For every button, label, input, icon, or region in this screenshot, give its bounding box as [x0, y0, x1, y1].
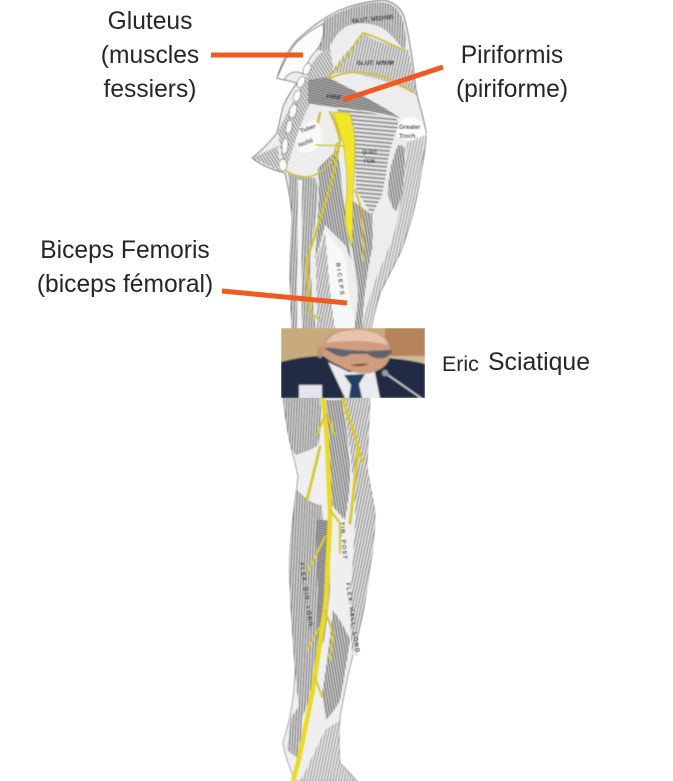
muscle text labels: GLUT. MEDIUS: [352, 15, 394, 25]
anatomical illustration: lower leg: [283, 398, 375, 781]
label: gluteus: fessiers): [104, 76, 196, 103]
label: biceps femoris: [37, 237, 213, 298]
label: biceps femoris: (biceps fémoral): [37, 271, 213, 298]
muscle text labels: Ischii: [298, 138, 314, 149]
biceps femoris tendon: [325, 230, 356, 330]
biceps right edge muscle: [352, 200, 373, 330]
piriformis muscle: [308, 77, 400, 118]
label: piriformis: Piriformis: [461, 42, 563, 69]
suit: [281, 356, 425, 398]
muscle text labels: PIRIF: [326, 94, 342, 102]
label: piriformis: (piriforme): [456, 76, 568, 103]
adductor region: [315, 150, 352, 262]
arrow: gluteus pointer: [211, 52, 303, 58]
dark calf centre muscle: [316, 520, 330, 660]
muscle text labels: FEM.: [364, 159, 377, 165]
label: gluteus: (muscles: [101, 42, 199, 69]
flexor hallucis muscle: [322, 610, 350, 720]
semitendinosus white band: [297, 180, 302, 330]
muscle text labels: [298, 15, 421, 297]
label: Eric Sciatique: Sciatique: [488, 349, 590, 376]
hamstring, inner thigh left: [288, 172, 318, 330]
microphone: [385, 373, 421, 398]
label: Eric Sciatique: [442, 349, 590, 376]
gluteus minimus muscle: [331, 34, 416, 95]
muscle text labels, lower leg: [298, 522, 360, 657]
arrow: biceps femoris pointer: [222, 291, 347, 303]
label: piriformis: [456, 42, 568, 103]
glasses: [323, 348, 392, 358]
muscle text labels: GLUT. MINIM: [357, 61, 394, 67]
quadratus femoris muscle: [354, 126, 396, 215]
ischial tuberosity bone: [296, 120, 322, 153]
middle popliteus muscle: [322, 400, 350, 520]
anatomical illustration: upper leg: [252, 0, 426, 330]
badge: [299, 385, 322, 398]
muscle text labels, lower leg: FLEX. DIG. LONG.: [298, 562, 313, 630]
small nerve branches, upper: [285, 33, 413, 320]
sacrotuberous ligament wedge: [252, 146, 280, 171]
muscle text labels: Greater: [399, 125, 421, 131]
ear: [317, 346, 323, 358]
coccyx bone chain: [279, 62, 313, 171]
photo background: [281, 328, 386, 363]
ankle: [287, 700, 303, 760]
greater trochanter bone: [397, 117, 426, 141]
ligaments beside sacrum: [278, 48, 334, 172]
semimembranosus strip between biceps and thigh edge: [316, 232, 335, 330]
muscle text labels: Tuber: [300, 123, 318, 135]
photo: portrait of Eric: [281, 328, 425, 398]
tibial nerve, lower leg: [293, 398, 330, 781]
muscle text labels: Troch.: [399, 134, 417, 140]
tie: [344, 374, 365, 398]
popliteal muscles: [284, 398, 321, 455]
muscle text labels, lower leg: FLEX. HALL. LONG.: [344, 582, 360, 657]
shirt: [328, 362, 380, 398]
muscle text labels, lower leg: TIB. POST: [338, 522, 347, 560]
vastus muscle: [388, 145, 405, 212]
tibial muscles left: [289, 490, 324, 720]
gluteus medius muscle: [318, 2, 406, 52]
mouth: [350, 364, 369, 366]
head: [321, 329, 390, 374]
label: gluteus: Gluteus: [108, 8, 192, 35]
nerve branches, lower leg: [307, 398, 363, 697]
lateral gastrocnemius muscle: [342, 398, 375, 656]
outer thigh: [362, 135, 424, 330]
bone: sacrum: [277, 24, 324, 80]
label: gluteus: [101, 8, 199, 103]
arrow: piriformis pointer: [343, 67, 443, 100]
muscle text labels: BICEPS: [334, 262, 345, 297]
label: biceps femoris: Biceps Femoris: [40, 237, 210, 264]
label: Eric Sciatique: Eric: [442, 352, 479, 376]
muscle text labels: QUAD: [362, 150, 377, 156]
obturator muscles: [335, 105, 404, 134]
sciatic nerve, upper: [333, 112, 355, 247]
thigh and hip silhouette: [252, 0, 426, 330]
calf silhouette: [283, 398, 375, 781]
